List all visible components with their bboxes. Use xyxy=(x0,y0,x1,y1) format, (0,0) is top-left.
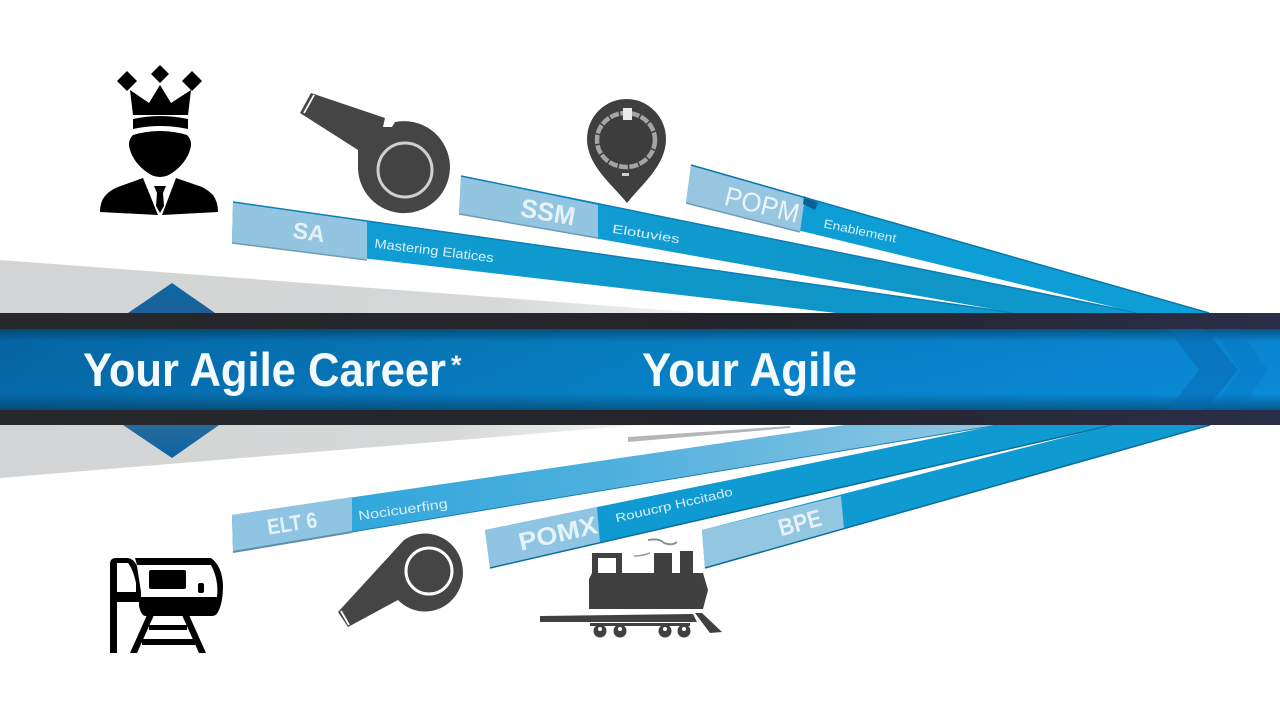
grey accent bar xyxy=(628,426,790,442)
label: SA: SA xyxy=(291,217,327,247)
central banner xyxy=(0,313,1280,425)
chevron: second xyxy=(1212,329,1268,410)
chevron: first xyxy=(1168,329,1238,410)
description: ELT: Nocicuerfing xyxy=(357,496,449,523)
strip: SSM xyxy=(459,176,1138,313)
grey wedge: top xyxy=(0,260,705,313)
strip: POMX xyxy=(485,425,1113,568)
icon: whistle bottom xyxy=(338,534,463,627)
strip: ELT xyxy=(232,425,998,552)
description: SA: Mastering Elatices xyxy=(374,236,495,265)
label: POMX: POMX xyxy=(516,511,600,557)
label: BPE: BPE xyxy=(775,505,825,542)
diamond: top xyxy=(125,283,218,315)
strip: POPM xyxy=(686,165,1209,313)
icon: rail machine xyxy=(110,558,223,653)
diamond: bottom xyxy=(120,423,222,458)
icon: whistle top xyxy=(300,93,450,213)
strip: BPE xyxy=(702,425,1210,568)
description: POMX: Rouucrp Hccitado xyxy=(614,485,734,525)
banner heading: right: Your Agile xyxy=(642,343,857,396)
description: SSM: Elotuvies xyxy=(611,222,681,246)
description: POPM: Enablement xyxy=(822,216,898,246)
icon: map pin xyxy=(587,99,666,203)
label: SSM: SSM xyxy=(518,192,578,232)
grey wedge: bottom xyxy=(0,425,640,478)
icon: locomotive xyxy=(540,539,722,638)
label: ELT: ELT 6 xyxy=(265,507,319,540)
label: POPM: POPM xyxy=(721,181,803,229)
strip: SA xyxy=(232,202,1015,313)
icon: crowned person xyxy=(100,65,218,215)
asterisk: * xyxy=(451,350,462,380)
banner heading: left: Your Agile Career xyxy=(83,343,446,396)
